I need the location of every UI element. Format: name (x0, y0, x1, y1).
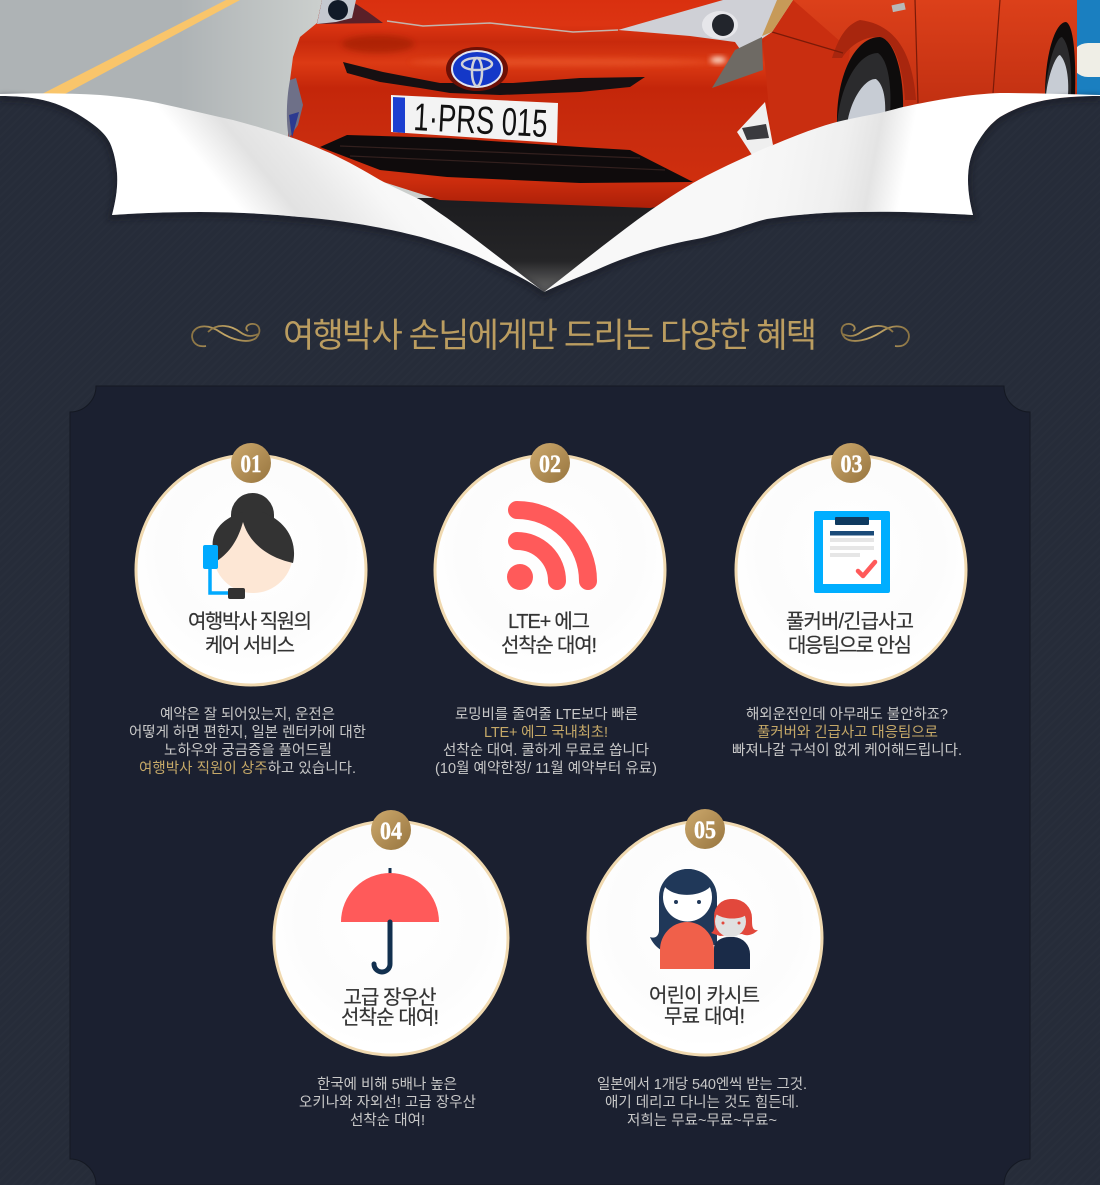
toyota emblem (446, 47, 508, 91)
upper grille slit (343, 62, 645, 95)
headlights (317, 0, 383, 24)
circle title: 무료 대여! (664, 1005, 745, 1028)
badge 01: 01 (240, 451, 262, 478)
circle title (188, 610, 312, 657)
section title: 여행박사 손님에게만 드리는 다양한 혜택 (283, 317, 817, 355)
circle (435, 455, 665, 685)
left white curl (0, 93, 544, 292)
description: 여행박사 직원이 상주하고 있습니다. (139, 760, 356, 777)
circle title: 어린이 카시트 (649, 984, 760, 1007)
badge 02: 02 (539, 451, 561, 478)
description: 어떻게 하면 편한지, 일본 렌터카에 대한 (129, 724, 366, 741)
description (435, 706, 657, 777)
description: 선착순 대여. 쿨하게 무료로 쏩니다 (443, 742, 649, 759)
circle title (501, 610, 597, 657)
circle title: 대응팀으로 안심 (788, 634, 912, 657)
description: 저희는 무료~무료~무료~ (627, 1112, 777, 1129)
circle title: LTE+ 에그 (508, 610, 590, 633)
description: LTE+ 에그 국내최초! (484, 724, 608, 741)
description: 일본에서 1개당 540엔씩 받는 그것. (597, 1076, 807, 1093)
wheels (832, 20, 916, 100)
licence plate (391, 95, 558, 143)
ornament: left flourish (192, 324, 259, 346)
benefit 02 (435, 443, 665, 777)
badge 03: 03 (840, 451, 862, 478)
dark page surface around the opening (0, 96, 1100, 300)
description (732, 706, 962, 759)
description (597, 1076, 807, 1129)
right white curl (544, 93, 1100, 292)
description (299, 1076, 476, 1129)
badge 03 (831, 443, 871, 483)
description: 풀커버와 긴급사고 대응팀으로 (757, 724, 938, 741)
benefit 04 (274, 810, 508, 1129)
description: 선착순 대여! (350, 1112, 425, 1129)
title row (192, 317, 909, 355)
benefits panel (70, 386, 1030, 1185)
circle title (649, 984, 760, 1028)
benefit 01 (129, 443, 366, 777)
circle title: 선착순 대여! (341, 1006, 439, 1029)
description: 애기 데리고 다니는 것도 힘든데. (605, 1094, 799, 1111)
badge 05: 05 (694, 817, 716, 844)
circle title (786, 610, 914, 657)
circle title: 고급 장우산 (344, 986, 436, 1009)
circle (274, 821, 508, 1055)
curl shadow (0, 98, 1100, 294)
description: 예약은 잘 되어있는지, 운전은 (160, 706, 335, 723)
circle (736, 455, 966, 685)
ornament: right flourish (842, 324, 909, 346)
circle title: 선착순 대여! (501, 634, 597, 657)
description: 오키나와 자외선! 고급 장우산 (299, 1094, 476, 1111)
icon: umbrella (341, 868, 439, 972)
badge 05 (685, 809, 725, 849)
circle title: 풀커버/긴급사고 (786, 610, 914, 633)
description: (10월 예약한정/ 11월 예약부터 유료) (435, 760, 657, 777)
badge 01 (231, 443, 271, 483)
description: 한국에 비해 5배나 높은 (317, 1076, 457, 1093)
circle title: 케어 서비스 (205, 634, 295, 657)
description (129, 706, 366, 777)
circle (136, 455, 366, 685)
circle (588, 821, 822, 1055)
badge 04 (371, 810, 411, 850)
icon: clipboard with check (814, 511, 890, 593)
lower grille (320, 135, 693, 183)
description: 노하우와 궁금증을 풀어드릴 (164, 742, 332, 759)
benefit 03 (732, 443, 966, 759)
badge 02 (530, 443, 570, 483)
icon: wifi signal (507, 510, 588, 590)
circle title (341, 986, 439, 1029)
icon: call agent with headset (203, 493, 294, 599)
hero photo: red car on a road: 1·PRS 015 (413, 96, 549, 146)
icon: mother and child (650, 869, 758, 969)
curled paper opening (0, 93, 1100, 300)
description: 로밍비를 줄여줄 LTE보다 빠른 (455, 706, 638, 723)
badge 04: 04 (380, 818, 402, 845)
description: 빠져나갈 구석이 없게 케어해드립니다. (732, 742, 962, 759)
description: 해외운전인데 아무래도 불안하죠? (746, 706, 948, 723)
hero photo: red car on a road (0, 0, 1100, 295)
benefit 05 (588, 809, 822, 1129)
circle title: 여행박사 직원의 (188, 610, 312, 633)
